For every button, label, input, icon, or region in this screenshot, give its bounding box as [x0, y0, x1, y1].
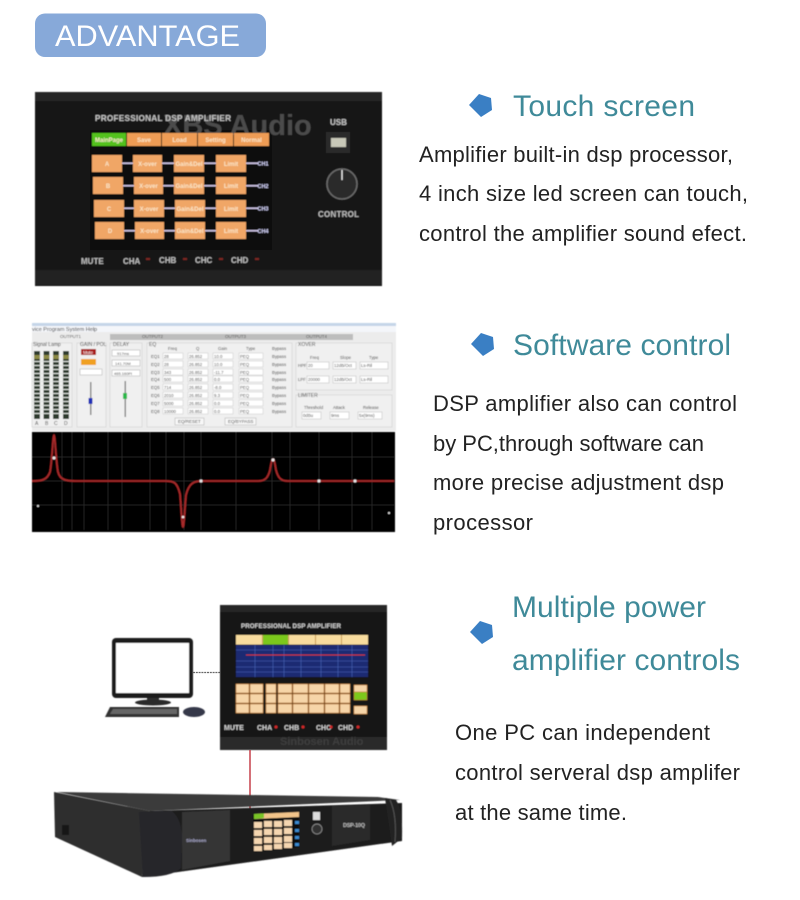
EQ parameter table: PEQ: [240, 401, 250, 406]
touch screen top buttons: Load: [172, 138, 187, 144]
touch screen channel rows: A: [105, 162, 110, 168]
chart: EQ frequency response curve: [32, 432, 395, 532]
indicator labels: CHD: [338, 725, 353, 732]
heading: Multiple power amplifier controls: amplifier controls: [512, 644, 740, 677]
EQ parameter table: [151, 346, 286, 414]
EQ parameter table: 26.852: [189, 385, 203, 390]
EQ parameter table: 2010: [164, 393, 174, 398]
crossover and limiter controls: 20: [308, 363, 313, 368]
EQ parameter table: Bypass: [272, 409, 286, 414]
text block: multiple control description: control serveral dsp amplifer: [455, 760, 740, 785]
EQ parameter table: Bypass: [272, 354, 286, 359]
crossover and limiter controls: HPF: [298, 363, 307, 368]
EQ buttons: EQ/RESET: [178, 419, 201, 424]
text block: multiple control description: [455, 720, 740, 825]
panel captions: EQ: [149, 342, 156, 348]
channel indicators: [81, 256, 259, 266]
signal level meters: A: [35, 421, 39, 427]
output tabs: OUTPUT1: [60, 334, 81, 339]
crossover and limiter controls: Ls-Ril: [361, 377, 372, 382]
EQ parameter table: EQ1: [151, 354, 160, 359]
EQ parameter table: 26.852: [189, 401, 203, 406]
EQ parameter table: Bypass: [272, 393, 286, 398]
parameter grid on screen: [236, 684, 367, 714]
EQ parameter table: 26.852: [189, 409, 203, 414]
signal level meters: C: [54, 421, 58, 427]
crossover and limiter controls: 12dB/Oct: [334, 377, 353, 382]
signal level meters: [32, 351, 70, 427]
text block: touch screen description: [419, 142, 748, 246]
EQ parameter table: Bypass: [272, 370, 286, 375]
crossover and limiter controls: Attack: [333, 405, 346, 410]
touch screen top buttons: Setting: [205, 138, 226, 144]
EQ parameter table: PEQ: [240, 377, 250, 382]
panel captions: XOVER: [298, 342, 316, 348]
crossover and limiter controls: 12dB/Oct: [334, 363, 353, 368]
EQ graph on screen: [236, 645, 368, 677]
touch screen channel rows: Gain&Del: [175, 162, 203, 168]
text block: touch screen description: Amplifier built-in dsp processor,: [419, 142, 733, 167]
USB port: [326, 118, 350, 153]
delay controls: [112, 350, 140, 417]
EQ parameter table: EQ6: [151, 393, 160, 398]
crossover and limiter controls: 0dBu: [303, 413, 314, 418]
crossover and limiter controls: Type: [369, 355, 379, 360]
indicator labels: CHC: [316, 725, 331, 732]
output tabs: [60, 334, 353, 340]
USB port: USB: [330, 118, 347, 127]
EQ parameter table: EQ8: [151, 409, 160, 414]
right grille with model name: [332, 805, 370, 846]
crossover and limiter controls: Slope: [340, 355, 352, 360]
EQ parameter table: 10.0: [214, 354, 223, 359]
touch screen channel rows: Limit: [224, 207, 238, 213]
sub panels: [32, 343, 392, 427]
crossover and limiter controls: Release: [363, 405, 379, 410]
indicator labels: MUTE: [224, 725, 244, 732]
delay controls: 141.70M: [115, 361, 131, 366]
EQ parameter table: 26.852: [189, 354, 203, 359]
text block: software control description: [433, 391, 737, 535]
EQ parameter table: 500: [164, 377, 172, 382]
EQ parameter table: 0.0: [214, 377, 221, 382]
crossover and limiter controls: Freq: [310, 355, 319, 360]
EQ parameter table: 28: [164, 362, 169, 367]
text block: software control description: processor: [433, 510, 533, 535]
panel captions: [33, 342, 318, 399]
amplifier product photo: DSP-10Q: [343, 823, 366, 829]
touch screen channel rows: Limit: [224, 184, 238, 190]
crossover and limiter controls: LPF: [298, 377, 306, 382]
EQ parameter table: 343: [164, 370, 172, 375]
touch screen channel rows: CH1: [257, 162, 269, 168]
heading: Software control: Software control: [513, 329, 731, 362]
touch screen channel rows: [92, 155, 269, 239]
EQ parameter table: Bypass: [272, 385, 286, 390]
EQ parameter table: 28: [164, 354, 169, 359]
control knob: [318, 169, 359, 219]
text block: software control description: more precise adjustment dsp: [433, 470, 724, 495]
gain controls: [80, 349, 102, 415]
header badge: ADVANTAGE: [35, 14, 266, 57]
EQ parameter table: EQ4: [151, 377, 160, 382]
panel captions: LIMITER: [298, 393, 318, 399]
EQ parameter table: 9.3: [214, 393, 221, 398]
EQ parameter table: EQ2: [151, 362, 160, 367]
EQ parameter table: 26.852: [189, 370, 203, 375]
icon: desktop computer with keyboard and mouse: [105, 638, 205, 717]
usb and knob: [313, 812, 320, 820]
EQ parameter table: 26.852: [189, 362, 203, 367]
channel indicators: CHB: [159, 256, 177, 265]
EQ parameter table: 0.0: [214, 409, 221, 414]
touch screen channel rows: X-over: [139, 184, 158, 190]
screen tab buttons: [236, 635, 368, 644]
EQ parameter table: 26.852: [189, 377, 203, 382]
signal level meters: D: [64, 421, 68, 427]
heading: Multiple power amplifier controls: [512, 591, 740, 677]
output tabs: OUTPUT2: [142, 334, 163, 339]
EQ parameter table: EQ7: [151, 401, 160, 406]
channel indicators: CHC: [195, 256, 213, 265]
delay controls: 917ms: [117, 351, 129, 356]
panel captions: GAIN / POL: [80, 342, 107, 348]
EQ parameter table: EQ5: [151, 385, 160, 390]
indicator labels: CHA: [257, 725, 272, 732]
EQ parameter table: -11.7: [214, 370, 224, 375]
EQ parameter table: PEQ: [240, 385, 250, 390]
touch screen top buttons: MainPage: [95, 138, 124, 144]
connector line: panel to amplifier: [249, 750, 251, 812]
EQ parameter table: Bypass: [272, 377, 286, 382]
panel: amplifier DSP screen close-up: PROFESSIONAL DSP AMPLIFIER: [241, 623, 342, 630]
touch screen channel rows: C: [107, 207, 112, 213]
icon: pentagon bullet 3: [470, 621, 493, 644]
EQ parameter table: PEQ: [240, 362, 250, 367]
crossover and limiter controls: Ls-Ril: [361, 363, 372, 368]
EQ parameter table: -8.0: [214, 385, 222, 390]
amplifier product photo: Sinbosen: [186, 838, 207, 843]
touch screen channel rows: X-over: [140, 207, 159, 213]
touch screen channel rows: B: [106, 184, 111, 190]
EQ parameter table: Type: [246, 346, 256, 351]
panel captions: DELAY: [113, 342, 130, 348]
EQ parameter table: 0.0: [214, 401, 221, 406]
control knob: CONTROL: [318, 210, 359, 219]
watermark: XBS Audio: [163, 110, 312, 142]
text block: software control description: DSP amplifier also can control: [433, 391, 737, 416]
output tabs: OUTPUT4: [306, 334, 327, 339]
touch screen top buttons: Normal: [241, 138, 262, 144]
panel title: PROFESSIONAL DSP AMPLIFIER: [95, 114, 231, 123]
header badge: ADVANTAGE: ADVANTAGE: [55, 20, 240, 53]
signal level meters: B: [45, 421, 49, 427]
panel: touch screen photo: [35, 92, 382, 286]
crossover and limiter controls: 5x(9ms): [359, 413, 375, 418]
left rack ear and handle: [139, 811, 182, 877]
EQ parameter table: Bypass: [272, 346, 286, 351]
panel: amplifier DSP screen close-up: [220, 605, 387, 750]
EQ parameter table: 714: [164, 385, 172, 390]
touch screen channel rows: X-over: [140, 229, 159, 235]
EQ parameter table: EQ3: [151, 370, 160, 375]
touch screen top buttons: Save: [137, 138, 152, 144]
amplifier top: [57, 792, 400, 811]
indicator labels: [224, 725, 360, 732]
crossover and limiter controls: 9ms: [331, 413, 339, 418]
EQ parameter table: 10000: [164, 409, 177, 414]
EQ parameter table: Q: [196, 346, 200, 351]
output tabs: OUTPUT3: [225, 334, 246, 339]
panel captions: Signal Lamp: [33, 342, 61, 348]
center panel screen: [253, 813, 299, 852]
channel indicators: CHA: [123, 257, 141, 266]
heading: Touch screen: Touch screen: [513, 90, 695, 123]
touch screen channel rows: Gain&Del: [176, 229, 204, 235]
panel: amplifier DSP screen close-up: Sinbosen Audio: [280, 736, 364, 748]
EQ parameter table: 26.852: [189, 393, 203, 398]
crossover and limiter controls: [298, 355, 388, 419]
EQ parameter table: Bypass: [272, 362, 286, 367]
delay controls: 465.160Ft: [114, 371, 133, 376]
EQ buttons: EQ/BYPASS: [228, 419, 253, 424]
indicator labels: CHB: [284, 725, 299, 732]
EQ parameter table: Freq: [168, 346, 177, 351]
icon: pentagon bullet 1: [469, 94, 492, 117]
touch screen top buttons: [92, 133, 269, 146]
channel indicators: CHD: [231, 256, 249, 265]
crossover and limiter controls: 20000: [308, 377, 321, 382]
connector line: PC to panel: [193, 672, 220, 674]
crossover and limiter controls: Threshold: [304, 405, 324, 410]
touch screen channel rows: Gain&Del: [175, 184, 203, 190]
amplifier side: [54, 792, 150, 877]
text block: touch screen description: 4 inch size led screen can touch,: [419, 181, 748, 206]
channel indicators: MUTE: [81, 257, 104, 266]
icon: pentagon bullet 2: [471, 333, 494, 356]
EQ parameter table: PEQ: [240, 354, 250, 359]
amplifier front: [142, 803, 402, 877]
heading: Multiple power amplifier controls: Multiple power: [512, 591, 706, 624]
text block: multiple control description: One PC can independent: [455, 720, 710, 745]
touch screen channel rows: CH3: [257, 206, 269, 212]
text block: software control description: by PC,through software can: [433, 431, 704, 456]
EQ parameter table: PEQ: [240, 409, 250, 414]
menu bar: vice Program System Help: [32, 327, 97, 333]
EQ parameter table: PEQ: [240, 370, 250, 375]
touch screen channel rows: Limit: [224, 229, 238, 235]
touch screen channel rows: Gain&Del: [176, 207, 204, 213]
EQ parameter table: Bypass: [272, 401, 286, 406]
EQ buttons: [175, 418, 256, 425]
text block: multiple control description: at the same time.: [455, 800, 627, 825]
left grille: [182, 810, 230, 870]
touch screen channel rows: X-over: [138, 162, 157, 168]
touch screen channel rows: D: [108, 229, 113, 235]
touch screen channel rows: CH4: [257, 229, 269, 235]
EQ parameter table: 5000: [164, 401, 174, 406]
gain controls: Mute: [83, 350, 94, 355]
touch screen channel rows: CH2: [257, 184, 269, 190]
amplifier product photo: [54, 792, 402, 877]
EQ parameter table: 10.0: [214, 362, 223, 367]
text block: touch screen description: control the amplifier sound efect.: [419, 221, 747, 246]
right handle: [385, 798, 402, 846]
EQ parameter table: PEQ: [240, 393, 250, 398]
panel: software control screenshot: [32, 323, 396, 431]
EQ parameter table: Gain: [218, 346, 228, 351]
touch screen channel rows: Limit: [224, 162, 238, 168]
